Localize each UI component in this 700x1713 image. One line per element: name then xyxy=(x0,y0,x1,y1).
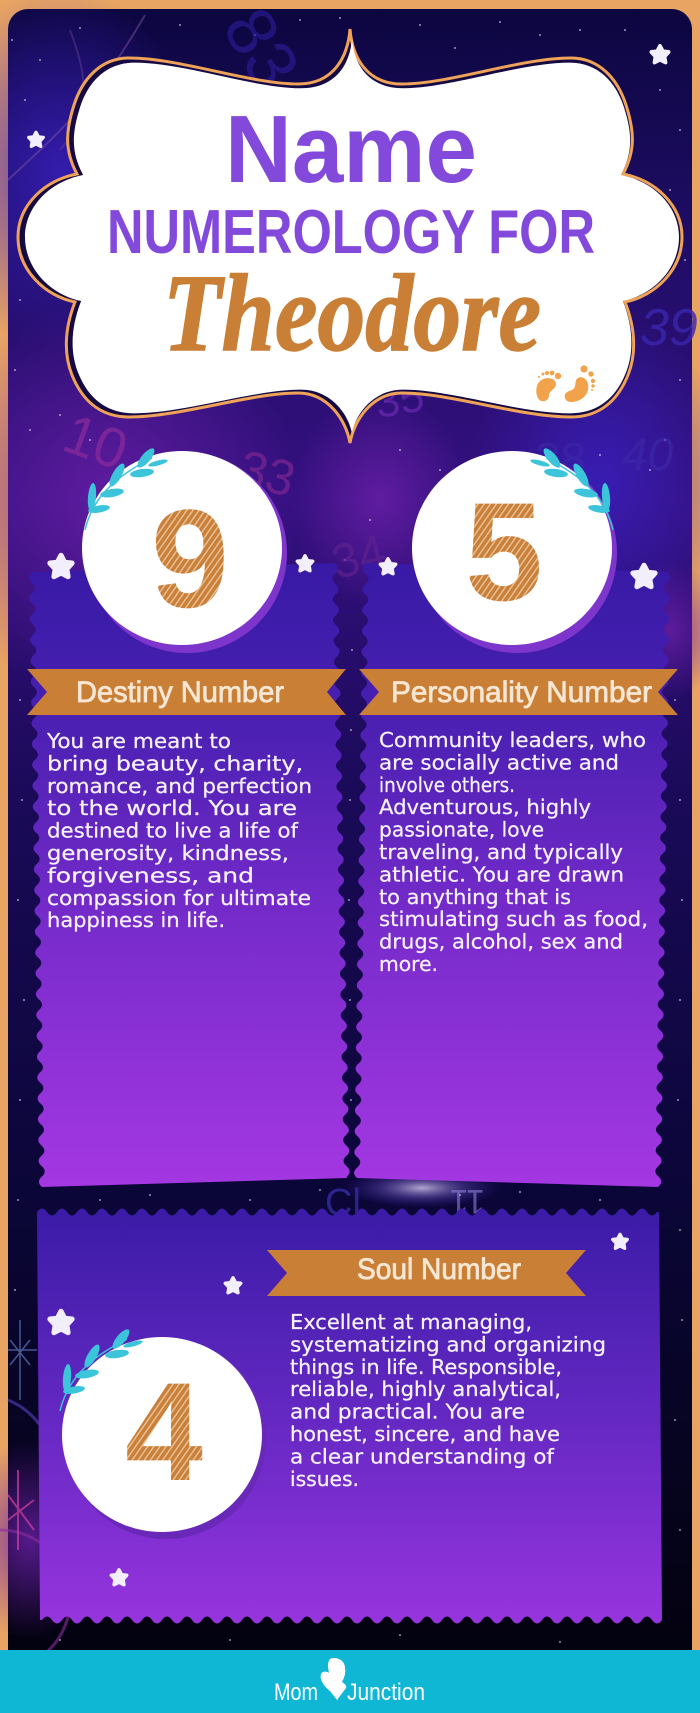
faint background numbers: 38 xyxy=(535,433,586,485)
soul text: and practical. You are xyxy=(290,1400,525,1424)
icon: mother and heart xyxy=(321,1658,346,1700)
ribbon: destiny number xyxy=(27,669,346,715)
footer band xyxy=(0,1650,700,1713)
soul text: issues. xyxy=(290,1467,359,1491)
destiny text: forgiveness, and xyxy=(47,863,254,887)
faint background numbers xyxy=(56,0,698,1224)
momjunction logo: Junction xyxy=(347,1679,425,1706)
title line: Name: Name xyxy=(225,96,477,203)
destiny text: happiness in life. xyxy=(47,908,225,932)
decorative stars xyxy=(50,555,655,1585)
personality text: Adventurous, highly xyxy=(379,795,591,819)
personality digit: 5 xyxy=(465,473,543,630)
panel: personality number xyxy=(354,446,678,1187)
destiny text: bring beauty, charity, xyxy=(47,751,303,775)
soul text: honest, sincere, and have xyxy=(290,1422,560,1446)
momjunction logo xyxy=(274,1658,425,1706)
number badge circle xyxy=(60,1327,266,1539)
soul text xyxy=(290,1310,606,1491)
personality text: to anything that is xyxy=(379,885,571,909)
personality text: drugs, alcohol, sex and xyxy=(379,930,623,954)
destiny digit: 9 xyxy=(151,480,229,637)
faint background numbers: 11 xyxy=(450,1182,485,1220)
ribbon: soul number xyxy=(267,1250,586,1296)
title line: Theodore: Theodore xyxy=(163,252,541,374)
personality text: more. xyxy=(379,952,438,976)
personality text: athletic. You are drawn xyxy=(379,862,624,886)
soul text: a clear understanding of xyxy=(290,1444,555,1468)
destiny text: You are meant to xyxy=(46,729,231,753)
ribbon: personality number xyxy=(359,669,678,715)
destiny text: generosity, kindness, xyxy=(47,841,289,865)
decorative title star top right xyxy=(652,46,668,62)
faint background numbers: 35 xyxy=(371,371,428,428)
soul digit: 4 xyxy=(125,1353,203,1510)
title line: Numerology for: NUMEROLOGY FOR xyxy=(107,198,595,267)
decorative title star left xyxy=(29,132,43,146)
faint background numbers: 10 xyxy=(56,401,136,482)
personality text xyxy=(379,728,648,976)
destiny text: compassion for ultimate xyxy=(47,886,311,910)
personality text: involve others. xyxy=(379,773,515,797)
number badge circle xyxy=(82,446,287,653)
destiny text: romance, and perfection xyxy=(47,774,312,798)
icon: leaf sprig xyxy=(85,446,168,530)
title plaque xyxy=(18,29,682,443)
soul text: Excellent at managing, xyxy=(290,1310,532,1334)
faint background numbers: Cl xyxy=(325,1182,361,1224)
destiny text: destined to live a life of xyxy=(47,819,299,843)
soul text: things in life. Responsible, xyxy=(290,1355,562,1379)
ribbon: soul number: Soul Number xyxy=(357,1253,521,1286)
faint background numbers: 39 xyxy=(640,299,698,357)
icon: leaf sprig xyxy=(530,446,613,530)
personality text: passionate, love xyxy=(379,818,544,842)
number badge circle xyxy=(412,446,617,653)
momjunction logo: Mom xyxy=(274,1679,318,1706)
faint background numbers: 34 xyxy=(326,525,392,590)
icon: baby feet xyxy=(536,365,595,402)
soul text: systematizing and organizing xyxy=(290,1332,606,1356)
icon: leaf sprig xyxy=(60,1327,143,1411)
destiny text xyxy=(46,729,312,932)
ribbon: destiny number: Destiny Number xyxy=(76,676,284,709)
faint background numbers: 40 xyxy=(622,428,674,480)
personality text: are socially active and xyxy=(379,750,619,774)
panel: soul number xyxy=(37,1208,662,1624)
soul text: reliable, highly analytical, xyxy=(290,1377,561,1401)
personality text: traveling, and typically xyxy=(379,840,623,864)
panel: destiny number xyxy=(27,446,350,1187)
faint background numbers: 33 xyxy=(233,439,301,508)
personality text: Community leaders, who xyxy=(379,728,646,752)
personality text: stimulating such as food, xyxy=(379,907,648,931)
destiny text: to the world. You are xyxy=(47,796,297,820)
ribbon: personality number: Personality Number xyxy=(391,676,652,709)
